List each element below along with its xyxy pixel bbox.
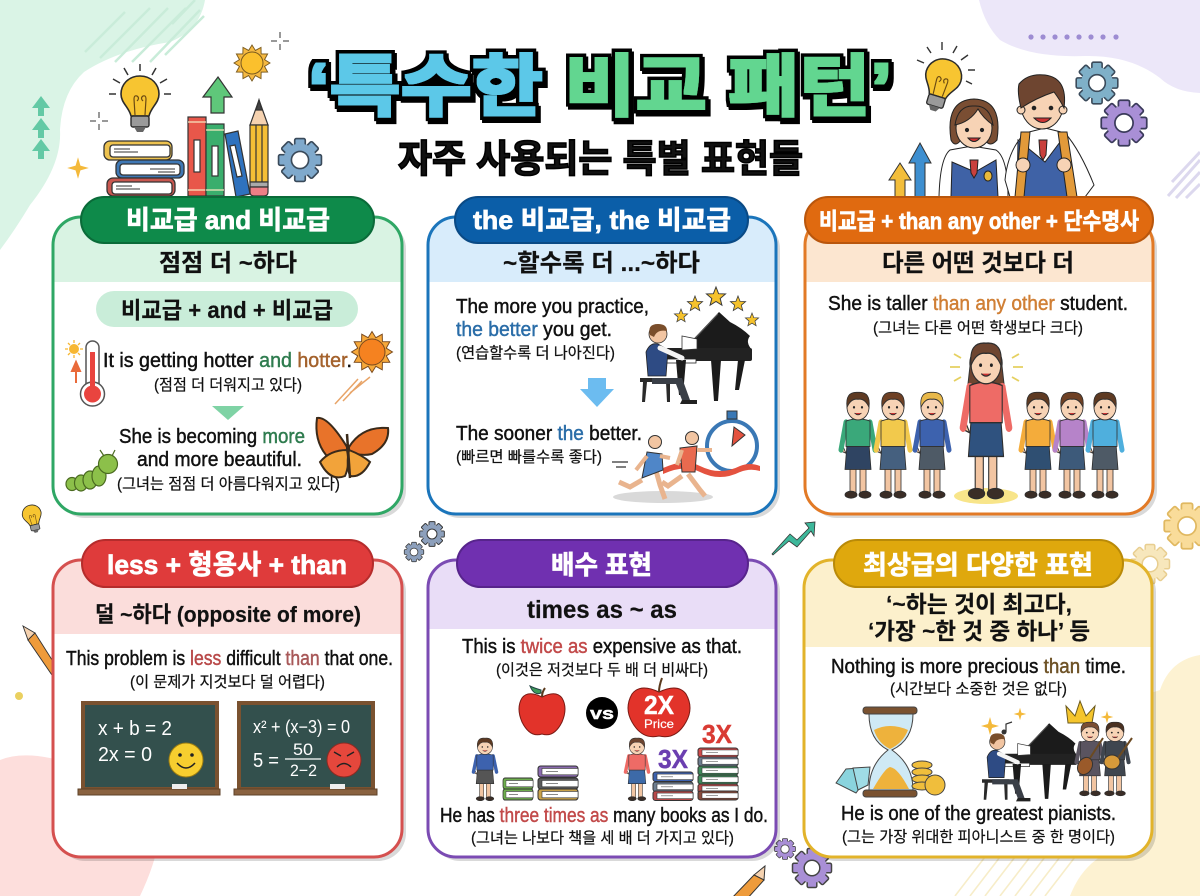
vs badge	[586, 697, 618, 729]
translation 1: (연습할수록 더 나아진다)	[456, 344, 615, 362]
example 2: and more beautiful.	[137, 449, 302, 471]
heading text: less + 형용사 + than	[107, 550, 347, 580]
chalkboard: hard	[234, 703, 377, 795]
smiley	[169, 743, 203, 777]
panel: less + 형용사 + than	[53, 540, 406, 861]
translation: (그녀는 다른 어떤 학생보다 크다)	[873, 319, 1083, 337]
arrow	[212, 406, 244, 420]
pill heading	[81, 197, 374, 243]
example 1: It is getting hotter and hotter.	[103, 350, 352, 372]
example 1: This is twice as expensive as that.	[462, 636, 742, 658]
meaning: ‘가장 ~한 것 중 하나’ 등	[868, 618, 1090, 644]
sun	[234, 45, 270, 81]
chalkboard: hard: 2−2	[290, 761, 317, 780]
translation 1: (시간보다 소중한 것은 없다)	[890, 680, 1067, 698]
example 2: The sooner the better.	[456, 423, 642, 445]
pill heading	[457, 540, 748, 587]
meaning: 다른 어떤 것보다 더	[882, 250, 1074, 277]
pill heading	[805, 197, 1153, 243]
chalkboard: easy	[78, 703, 220, 795]
icon: small bulb	[20, 503, 46, 535]
panel: 비교급 and 비교급	[53, 197, 406, 518]
pencil	[250, 100, 268, 196]
vs badge: vs	[590, 704, 614, 723]
chalkboard: hard: x² + (x−3) = 0	[253, 717, 350, 737]
icon: cream gears right	[1164, 503, 1200, 549]
icon: green up arrows	[32, 96, 50, 159]
upright books	[188, 117, 250, 197]
icon: gears centre left	[420, 522, 444, 546]
pill heading	[834, 540, 1123, 587]
icon: runners and stopwatch	[612, 411, 760, 503]
formula pill	[96, 291, 358, 327]
icon: bulb	[916, 42, 975, 116]
illustration: students, bulb, gears	[889, 34, 1147, 197]
translation 1: (점점 더 더워지고 있다)	[154, 376, 302, 394]
illustration: tall girl and classmates	[841, 343, 1122, 504]
icon: teal zigzag arrow	[772, 522, 815, 555]
translation 2: (그녀는 나보다 책을 세 배 더 가지고 있다)	[471, 829, 734, 847]
girl and books: 3X	[658, 744, 689, 774]
icon: expensive apple	[628, 678, 690, 737]
icon: pencil left	[23, 626, 54, 678]
arrows	[889, 163, 911, 197]
translation 1: (이것은 저것보다 두 배 더 비싸다)	[496, 661, 708, 679]
example 2	[119, 426, 305, 471]
icon: pencil bottom	[730, 866, 765, 896]
gears	[1076, 62, 1118, 104]
meaning: 점점 더 ~하다	[159, 250, 297, 277]
boy student	[1005, 75, 1094, 197]
meaning: 덜 ~하다 (opposite of more)	[95, 602, 361, 627]
example 1	[456, 296, 649, 341]
meaning: times as ~ as	[527, 596, 677, 624]
boy and books	[473, 738, 578, 801]
example: She is taller than any other student.	[828, 293, 1128, 315]
arrow	[580, 378, 614, 407]
stacked books	[104, 141, 184, 196]
icon: purple gears bottom	[775, 839, 795, 859]
heading text: 최상급의 다양한 표현	[863, 550, 1093, 580]
meaning: ~할수록 더 ...~하다	[503, 250, 700, 277]
example 1: the better you get.	[456, 319, 612, 341]
gear	[279, 139, 321, 181]
translation 2: (그는 가장 위대한 피아니스트 중 한 명이다)	[842, 828, 1115, 846]
icon: caterpillar	[66, 450, 118, 491]
icon: hourglass with gems and coins	[836, 707, 945, 797]
heading text: 비교급 + than any other + 단수명사	[819, 208, 1139, 234]
chalkboard: hard: 5 =	[253, 750, 279, 772]
heading text: the 비교급, the 비교급	[473, 205, 731, 235]
panel: 최상급의 다양한 표현	[804, 540, 1156, 861]
example 1: Nothing is more precious than time.	[831, 656, 1126, 678]
icon: thermometer	[65, 340, 104, 406]
girl and books: 3X	[702, 719, 733, 749]
meaning	[868, 591, 1090, 644]
title: ‘특수한 비교 패턴’	[308, 50, 892, 125]
heading text: 배수 표현	[551, 550, 652, 580]
heading text: 비교급 and 비교급	[126, 205, 330, 235]
pill heading	[82, 540, 373, 587]
angry face	[327, 743, 361, 777]
translation 2: (그녀는 점점 더 아름다워지고 있다)	[117, 475, 340, 493]
green arrow	[203, 77, 232, 113]
chalkboard: easy: 2x = 0	[98, 744, 152, 766]
panel: 배수 표현	[428, 540, 780, 861]
icon: pianist	[640, 312, 752, 404]
girl and books	[625, 719, 738, 801]
translation: (이 문제가 지것보다 덜 어렵다)	[130, 673, 325, 691]
icon: sparkle star	[67, 157, 89, 179]
decorations between panels	[15, 503, 1200, 896]
icon: expensive apple: 2X	[644, 690, 675, 720]
girl student	[939, 99, 1008, 197]
meaning: ‘~하는 것이 최고다,	[886, 591, 1072, 617]
formula pill: 비교급 + and + 비교급	[121, 297, 333, 323]
pill heading	[455, 197, 748, 243]
example 2: He is one of the greatest pianists.	[841, 803, 1116, 825]
translation 2: (빠르면 빠를수록 좋다)	[456, 448, 602, 466]
icon: butterfly	[316, 418, 388, 478]
icon: apple	[519, 686, 565, 735]
panel: 비교급 + than any other + 단수명사	[805, 197, 1157, 518]
example 2: She is becoming more	[119, 426, 305, 448]
example 1: The more you practice,	[456, 296, 649, 318]
example 2: He has three times as many books as I do.	[440, 805, 768, 827]
chalkboard: hard: 50	[293, 740, 313, 759]
subtitle: 자주 사용되는 특별 표현들	[398, 139, 803, 181]
chalkboard: easy: x + b = 2	[98, 718, 172, 740]
stars	[674, 287, 759, 326]
icon: expensive apple: Price	[644, 717, 674, 731]
panel: the 비교급, the 비교급	[428, 197, 780, 518]
decorative dots	[1028, 34, 1119, 40]
icon: sun	[335, 332, 392, 404]
example: This problem is less difficult than that one.	[66, 648, 393, 670]
icon: pianist with musicians	[981, 701, 1132, 801]
illustration: books, bulb and pencil	[90, 32, 321, 197]
icon: light bulb	[109, 64, 171, 132]
